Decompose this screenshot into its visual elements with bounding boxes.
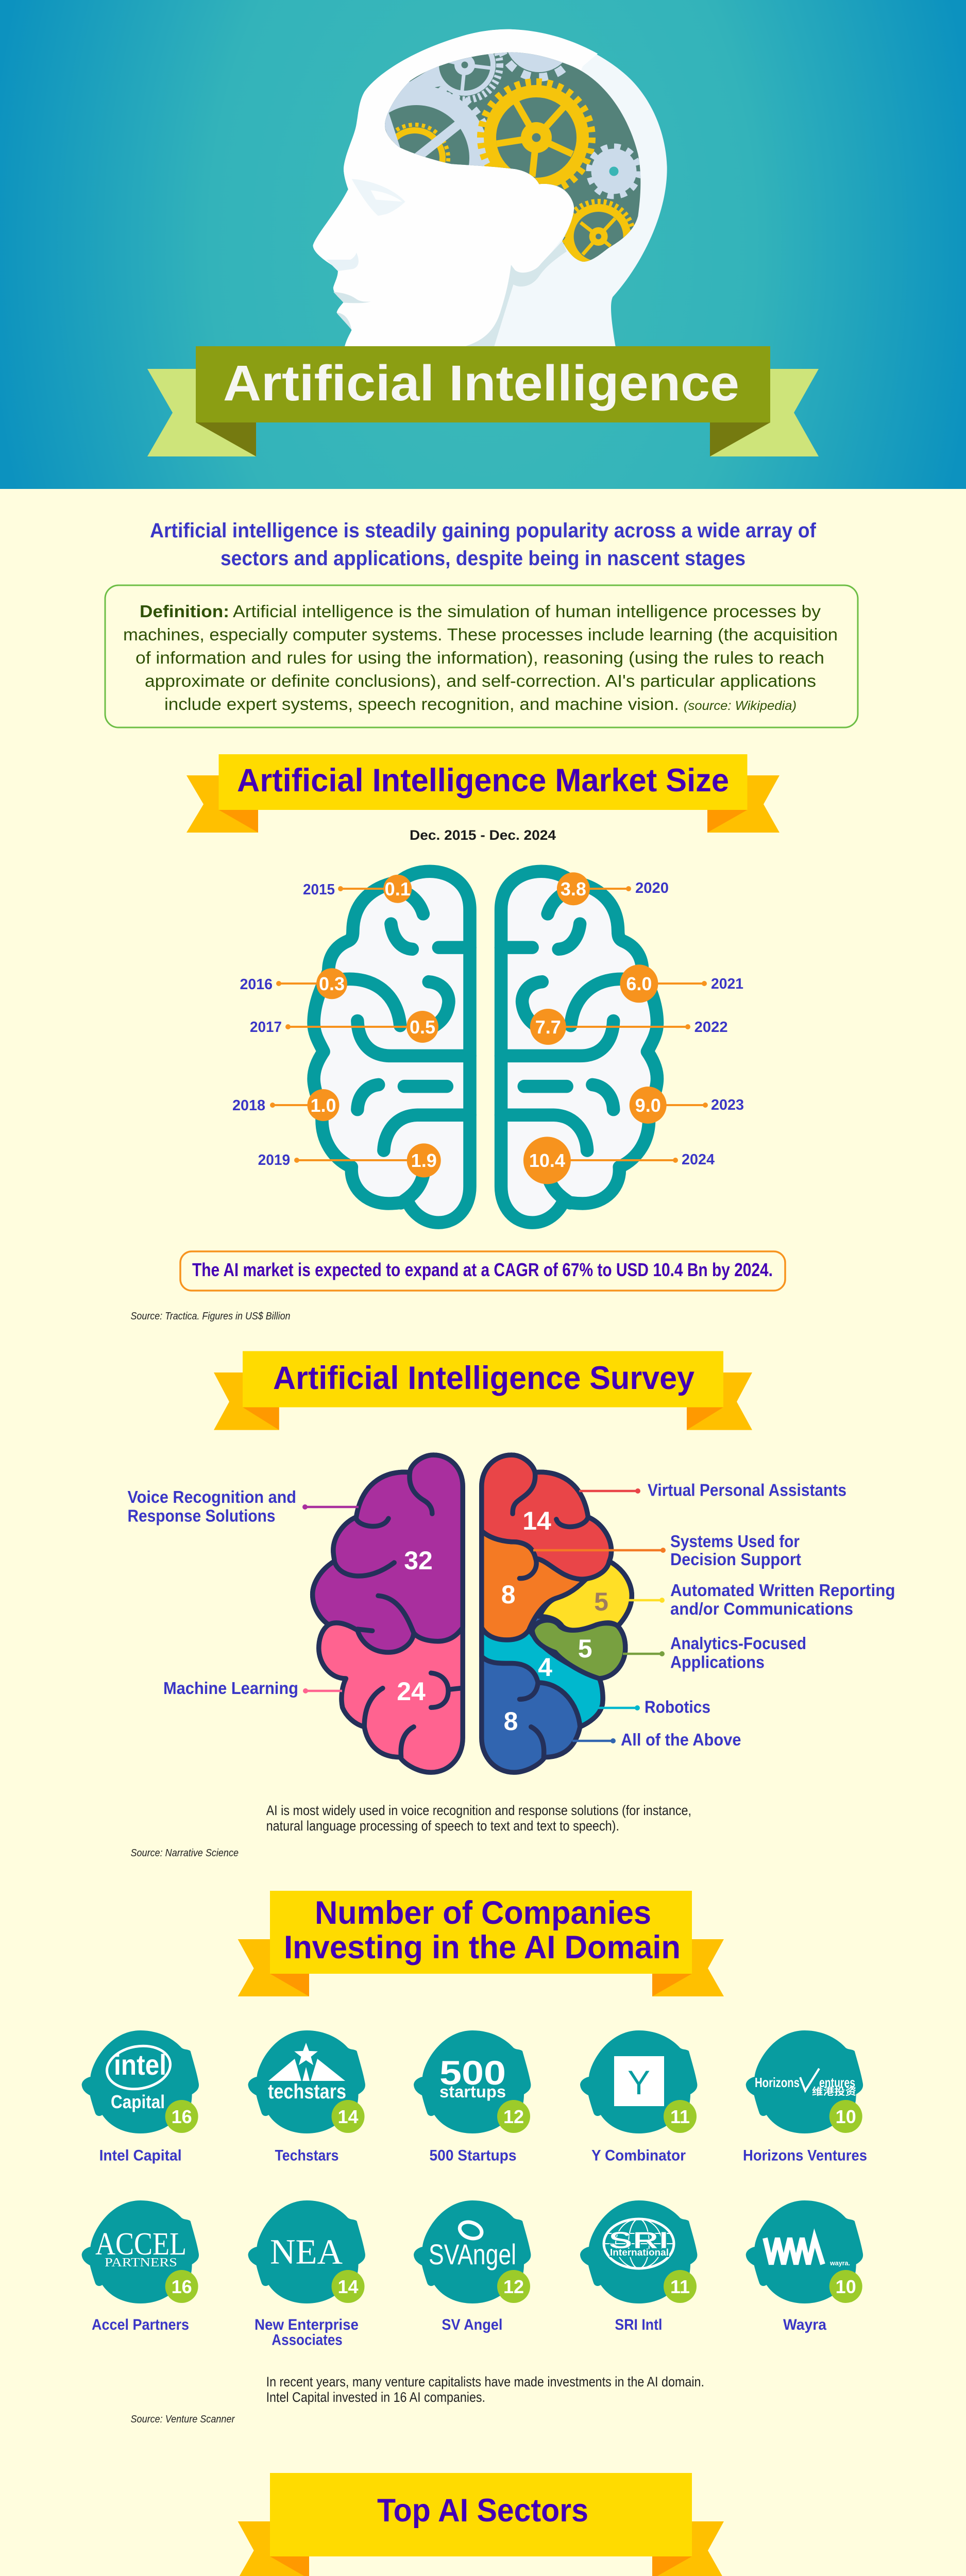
survey labels: Robotics <box>645 1697 710 1717</box>
company: 500 Startups <box>414 2030 531 2164</box>
chart: market size brain: 3.8 <box>561 878 586 900</box>
company: Techstars <box>248 2030 365 2164</box>
chart: survey brain <box>128 1455 895 1772</box>
chart: market size brain: 2018 <box>232 1097 265 1114</box>
chart: market size brain: 2024 <box>682 1151 715 1168</box>
company: 500 Startups: 12 <box>503 2106 524 2127</box>
company: Intel Capital: Intel Capital <box>99 2147 182 2164</box>
heading ribbon: companies: Number of Companies <box>315 1895 651 1931</box>
company: Techstars: techstars <box>268 2080 346 2103</box>
callout: CAGR <box>180 1251 785 1291</box>
company: Accel Partners: PARTNERS <box>105 2256 177 2269</box>
header background <box>0 0 966 489</box>
survey labels: Response Solutions <box>128 1506 275 1525</box>
company: Y Combinator: Y <box>628 2063 650 2102</box>
survey labels: Voice Recognition and <box>128 1487 296 1506</box>
chart: market size brain: 2019 <box>258 1152 290 1168</box>
gears inside the head <box>385 52 641 262</box>
chart: market size brain: 2016 <box>240 976 273 993</box>
survey labels: Virtual Personal Assistants <box>648 1481 846 1500</box>
survey leader lines <box>302 1488 666 1743</box>
heading ribbon: market size: Artificial Intelligence Market Size <box>237 762 729 799</box>
company: New Enterprise Associates: New Enterprise <box>255 2316 359 2333</box>
company: Accel Partners: 16 <box>172 2276 192 2297</box>
chart: market size brain: 0.5 <box>410 1016 435 1038</box>
subtitle: Artificial intelligence is steadily gaining popularity across a wide array of <box>150 519 817 542</box>
heading ribbon: top sectors: Top AI Sectors <box>377 2493 588 2529</box>
company: Y Combinator: Y Combinator <box>591 2147 686 2164</box>
company: Y Combinator <box>580 2030 697 2164</box>
company: Horizons Ventures: 维港投资 <box>812 2086 856 2097</box>
panel: definition box: approximate or definite conclusions), and self-correction. AI's particular applications <box>145 671 816 690</box>
right hemisphere <box>482 1455 632 1772</box>
text: survey note <box>266 1803 691 1834</box>
panel: definition box: of information and rules for using the information), reasoning (using the rules to reach <box>135 648 824 667</box>
company: SRI Intl <box>580 2200 697 2333</box>
gear: top light <box>427 53 503 103</box>
chart: market size brain: 9.0 <box>635 1095 661 1116</box>
panel: definition box <box>105 585 858 727</box>
company: 500 Startups: 500 <box>439 2054 506 2092</box>
gear: large yellow <box>481 82 592 193</box>
chart: market size brain: 1.0 <box>310 1095 336 1116</box>
chart: market size brain: 1.9 <box>411 1150 437 1171</box>
title ribbon <box>147 346 819 456</box>
survey values: 24 <box>397 1677 426 1706</box>
chart: market size brain: 0.1 <box>385 878 411 900</box>
source note: companies: Source: Venture Scanner <box>131 2414 235 2425</box>
value badges <box>307 872 667 1184</box>
text: survey note: AI is most widely used in voice recognition and response solutions (for instance, <box>266 1803 691 1818</box>
survey labels: and/or Communications <box>670 1599 853 1618</box>
company: Horizons Ventures: Horizons Ventures <box>743 2147 867 2164</box>
company: Horizons Ventures: 10 <box>836 2106 856 2127</box>
gear: top-right light <box>499 53 566 81</box>
survey labels: Automated Written Reporting <box>670 1581 895 1600</box>
company: Accel Partners: ACCEL <box>95 2227 187 2262</box>
subtitle: sectors and applications, despite being in nascent stages <box>221 547 745 570</box>
company: Wayra <box>746 2200 863 2333</box>
company: Intel Capital: Capital <box>111 2091 165 2112</box>
survey labels <box>128 1481 895 1749</box>
company: Horizons Ventures <box>743 2030 867 2164</box>
company: SV Angel: SVAngel <box>429 2238 516 2270</box>
gear: left light <box>385 67 490 166</box>
company: 500 Startups: startups <box>439 2082 506 2101</box>
panel: definition box: (source: Wikipedia) <box>684 699 796 713</box>
survey values: 32 <box>404 1546 433 1575</box>
leader lines and year labels <box>270 886 708 1163</box>
company: Y Combinator: 11 <box>670 2106 690 2127</box>
survey values: 8 <box>504 1707 518 1736</box>
company: Wayra: Wayra <box>783 2316 826 2333</box>
text: companies note: Intel Capital invested in 16 AI companies. <box>266 2389 485 2405</box>
subtitle <box>150 519 817 570</box>
survey labels: Machine Learning <box>163 1679 298 1698</box>
company: Horizons Ventures: Horizons <box>755 2075 800 2090</box>
heading ribbon: companies <box>238 1891 724 1996</box>
survey labels: Systems Used for <box>670 1532 800 1551</box>
company: New Enterprise Associates <box>248 2200 365 2348</box>
panel: definition box: Artificial intelligence is the simulation of human intelligence processes by <box>233 602 821 621</box>
company: Accel Partners: Accel Partners <box>92 2316 189 2333</box>
company: New Enterprise Associates: Associates <box>272 2331 343 2348</box>
survey values <box>397 1506 608 1736</box>
company: SV Angel: 12 <box>503 2276 524 2297</box>
panel: definition box: Definition: <box>140 602 229 621</box>
chart: market size brain: 2020 <box>635 880 669 896</box>
gear: right light <box>589 146 639 196</box>
text: companies note <box>266 2374 704 2405</box>
chart: market size brain: 2022 <box>694 1019 728 1036</box>
company: Wayra: wayra. <box>829 2259 850 2267</box>
company: SRI Intl: SRI <box>608 2227 669 2253</box>
callout: CAGR: The AI market is expected to expand at a CAGR of 67% to USD 10.4 Bn by 2024. <box>192 1259 773 1280</box>
company: Intel Capital: 16 <box>172 2106 192 2127</box>
chart: market size brain: 2021 <box>711 976 743 992</box>
company: Horizons Ventures: entures <box>819 2075 855 2090</box>
survey labels: Analytics-Focused <box>670 1634 806 1653</box>
heading ribbon: survey <box>214 1351 752 1430</box>
company: New Enterprise Associates: 14 <box>337 2276 359 2297</box>
company: New Enterprise Associates: NEA <box>270 2232 343 2272</box>
company: Accel Partners <box>82 2200 199 2333</box>
heading ribbon: top sectors <box>238 2473 724 2576</box>
chart: market size brain: 10.4 <box>529 1150 565 1171</box>
chart: market size brain: 2023 <box>711 1097 744 1113</box>
company: SRI Intl: 11 <box>670 2276 690 2297</box>
date range: Dec. 2015 - Dec. 2024 <box>410 827 556 843</box>
chart: market size brain: 0.3 <box>319 973 345 994</box>
panel: definition box: include expert systems, speech recognition, and machine vision. <box>164 694 679 714</box>
text: companies note: In recent years, many venture capitalists have made investments in the AI domain. <box>266 2374 704 2389</box>
survey values: 8 <box>501 1580 516 1609</box>
title text: Artificial Intelligence <box>223 355 739 411</box>
company: Wayra: 10 <box>836 2276 856 2297</box>
left hemisphere <box>313 1455 463 1772</box>
survey values: 5 <box>594 1587 608 1616</box>
source note: survey: Source: Narrative Science <box>131 1848 239 1859</box>
chart: market size brain: 6.0 <box>626 973 652 994</box>
survey labels: Applications <box>670 1653 765 1671</box>
heading ribbon: market size <box>187 754 779 833</box>
panel: definition box: machines, especially computer systems. These processes include learning (the acquisition <box>123 625 838 644</box>
chart: market size brain <box>232 871 744 1223</box>
company: Intel Capital: intel <box>114 2048 166 2081</box>
survey labels: All of the Above <box>621 1730 741 1749</box>
company: SRI Intl: International <box>610 2247 669 2258</box>
heading ribbon: companies: Investing in the AI Domain <box>284 1929 681 1965</box>
chart: market size brain: 2015 <box>303 882 335 898</box>
company: SRI Intl: SRI Intl <box>615 2316 662 2333</box>
company: 500 Startups: 500 Startups <box>430 2147 516 2164</box>
survey values: 14 <box>522 1506 551 1535</box>
survey values: 5 <box>578 1634 592 1663</box>
chart: market size brain: 2017 <box>250 1019 282 1036</box>
company: SV Angel <box>414 2200 531 2333</box>
survey values: 4 <box>538 1653 552 1682</box>
company: Intel Capital <box>82 2030 199 2164</box>
chart: market size brain: 7.7 <box>535 1016 561 1038</box>
heading ribbon: survey: Artificial Intelligence Survey <box>273 1360 694 1396</box>
company: Techstars: 14 <box>337 2106 359 2127</box>
text: survey note: natural language processing of speech to text and text to speech). <box>266 1818 619 1834</box>
illustration: head with gears <box>313 0 667 346</box>
survey labels: Decision Support <box>670 1550 801 1569</box>
company: Techstars: Techstars <box>275 2147 339 2164</box>
gear: lower yellow <box>564 201 634 272</box>
company: SV Angel: SV Angel <box>442 2316 502 2333</box>
source note: market: Source: Tractica. Figures in US$ Billion <box>131 1311 291 1322</box>
